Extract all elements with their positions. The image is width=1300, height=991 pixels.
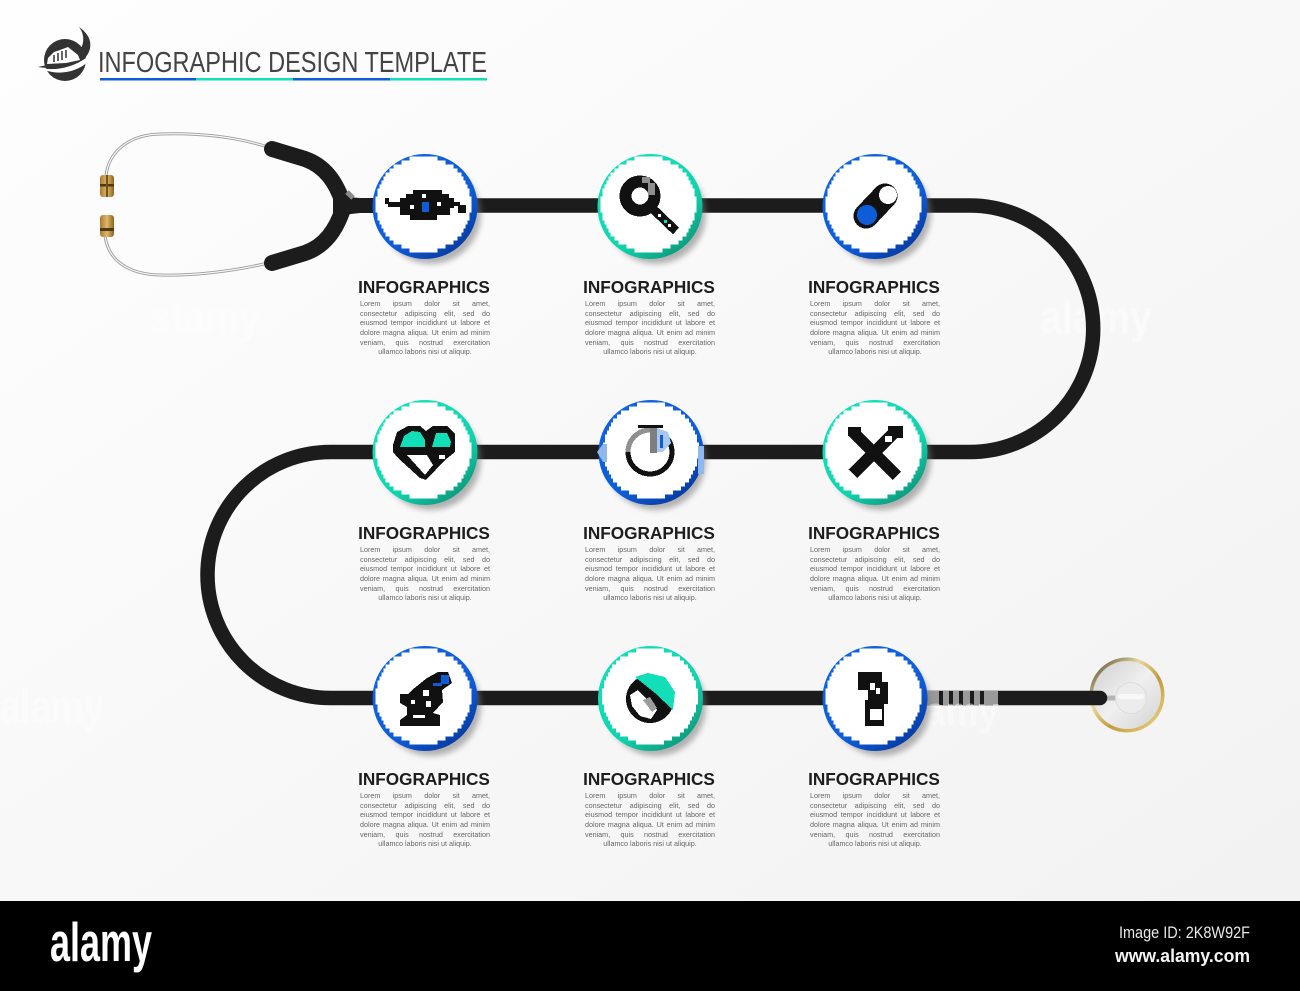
text block: step 9 bbox=[808, 769, 940, 848]
step 4 badge: heart bbox=[372, 400, 481, 510]
watermark: faint alamy marks: alamy bbox=[0, 680, 104, 732]
text block: step 4: Lorem ipsum dolor sit amet, bbox=[360, 545, 490, 554]
text block: step 2 bbox=[583, 277, 715, 356]
text block: step 1: Lorem ipsum dolor sit amet, bbox=[360, 299, 490, 308]
footer url: www.alamy.com bbox=[1114, 946, 1250, 966]
text block: step 8: Lorem ipsum dolor sit amet, bbox=[585, 791, 715, 800]
text block: step 9: consectetur adipiscing elit, sed do bbox=[810, 801, 940, 810]
text block: step 1: ullamco laboris nisi ut aliquip. bbox=[378, 347, 472, 356]
text block: step 1: consectetur adipiscing elit, sed do bbox=[360, 309, 490, 318]
text block: step 3: ullamco laboris nisi ut aliquip. bbox=[828, 347, 922, 356]
text block: step 2: eiusmod tempor incididunt ut labore et bbox=[585, 318, 715, 327]
icon: heart bbox=[393, 426, 455, 480]
text block: step 2: consectetur adipiscing elit, sed do bbox=[585, 309, 715, 318]
text block: step 7: ullamco laboris nisi ut aliquip. bbox=[378, 839, 472, 848]
watermark: faint alamy marks: alamy bbox=[1040, 291, 1152, 343]
text block: step 5 bbox=[583, 523, 715, 602]
text block: step 1: veniam, quis nostrud exercitation bbox=[360, 338, 490, 347]
text block: step 2: INFOGRAPHICS bbox=[583, 277, 715, 297]
icon: clock bbox=[628, 425, 672, 474]
tube watermark: amy bbox=[925, 690, 1000, 734]
text block: step 1 bbox=[358, 277, 490, 356]
text block: step 8: eiusmod tempor incididunt ut labore et bbox=[585, 810, 715, 819]
text block: step 2: veniam, quis nostrud exercitation bbox=[585, 338, 715, 347]
text block: step 8: veniam, quis nostrud exercitation bbox=[585, 830, 715, 839]
text block: step 7: Lorem ipsum dolor sit amet, bbox=[360, 791, 490, 800]
logo icon bbox=[38, 27, 90, 81]
step 9 badge: bottle bbox=[822, 646, 931, 756]
text block: step 7: dolore magna aliqua. Ut enim ad minim bbox=[360, 820, 490, 829]
serpentine tube path bbox=[207, 206, 1100, 698]
text block: step 5: veniam, quis nostrud exercitation bbox=[585, 584, 715, 593]
footer logo: alamy bbox=[50, 911, 152, 973]
step 3 badge: capsule bbox=[822, 154, 931, 264]
text block: step 3 bbox=[808, 277, 940, 356]
watermark: faint alamy marks: stamy bbox=[150, 291, 260, 343]
text block: step 3: Lorem ipsum dolor sit amet, bbox=[810, 299, 940, 308]
icon: crossed tools bbox=[848, 426, 903, 476]
icon: bottle bbox=[858, 672, 888, 726]
text block: step 7: consectetur adipiscing elit, sed do bbox=[360, 801, 490, 810]
text block: step 5: Lorem ipsum dolor sit amet, bbox=[585, 545, 715, 554]
step 8 badge: gauge bbox=[598, 646, 706, 756]
text block: step 8: consectetur adipiscing elit, sed do bbox=[585, 801, 715, 810]
watermark: faint alamy marks bbox=[0, 291, 1152, 732]
text block: step 8: dolore magna aliqua. Ut enim ad minim bbox=[585, 820, 715, 829]
text block: step 6: ullamco laboris nisi ut aliquip. bbox=[828, 593, 922, 602]
text block: step 4 bbox=[358, 523, 490, 602]
text block: step 6: Lorem ipsum dolor sit amet, bbox=[810, 545, 940, 554]
text block: step 9: dolore magna aliqua. Ut enim ad minim bbox=[810, 820, 940, 829]
text block: step 2: dolore magna aliqua. Ut enim ad minim bbox=[585, 328, 715, 337]
icon: magnifier bbox=[626, 177, 676, 231]
icon: capsule bbox=[857, 186, 897, 225]
text block: step 9: veniam, quis nostrud exercitation bbox=[810, 830, 940, 839]
text block: step 5: consectetur adipiscing elit, sed do bbox=[585, 555, 715, 564]
text block: step 6: eiusmod tempor incididunt ut labore et bbox=[810, 564, 940, 573]
step 6 badge: crossed tools bbox=[822, 400, 931, 510]
text block: step 2: Lorem ipsum dolor sit amet, bbox=[585, 299, 715, 308]
text block: step 8: ullamco laboris nisi ut aliquip. bbox=[603, 839, 697, 848]
text block: step 1: eiusmod tempor incididunt ut labore et bbox=[360, 318, 490, 327]
text block: step 5: dolore magna aliqua. Ut enim ad minim bbox=[585, 574, 715, 583]
text block: step 9: ullamco laboris nisi ut aliquip. bbox=[828, 839, 922, 848]
text block: step 4: INFOGRAPHICS bbox=[358, 523, 490, 543]
text block: step 3: consectetur adipiscing elit, sed do bbox=[810, 309, 940, 318]
text block: step 3: veniam, quis nostrud exercitation bbox=[810, 338, 940, 347]
text block: step 4: ullamco laboris nisi ut aliquip. bbox=[378, 593, 472, 602]
text block: step 4: eiusmod tempor incididunt ut labore et bbox=[360, 564, 490, 573]
text block: step 5: INFOGRAPHICS bbox=[583, 523, 715, 543]
icon: gauge bbox=[626, 673, 675, 723]
text block: step 3: eiusmod tempor incididunt ut labore et bbox=[810, 318, 940, 327]
text block: step 7: INFOGRAPHICS bbox=[358, 769, 490, 789]
text block: step 6: INFOGRAPHICS bbox=[808, 523, 940, 543]
text block: step 7 bbox=[358, 769, 490, 848]
text block: step 7: eiusmod tempor incididunt ut labore et bbox=[360, 810, 490, 819]
text block: step 5: eiusmod tempor incididunt ut labore et bbox=[585, 564, 715, 573]
title underline bbox=[100, 78, 487, 80]
stethoscope Y-shaped binaural tube bbox=[272, 149, 380, 263]
text block: step 7: veniam, quis nostrud exercitation bbox=[360, 830, 490, 839]
text block: step 1: INFOGRAPHICS bbox=[358, 277, 490, 297]
text block: step 3: INFOGRAPHICS bbox=[808, 277, 940, 297]
step 1 badge: eye bbox=[372, 154, 481, 264]
text block: step 6: dolore magna aliqua. Ut enim ad minim bbox=[810, 574, 940, 583]
text block: step 6: veniam, quis nostrud exercitation bbox=[810, 584, 940, 593]
text block: step 4: consectetur adipiscing elit, sed do bbox=[360, 555, 490, 564]
text block: step 9: eiusmod tempor incididunt ut labore et bbox=[810, 810, 940, 819]
step 2 badge: magnifier bbox=[598, 154, 706, 264]
text block: step 8: INFOGRAPHICS bbox=[583, 769, 715, 789]
step 7 badge: microscope bbox=[372, 646, 481, 756]
title: INFOGRAPHIC DESIGN TEMPLATE bbox=[98, 47, 487, 79]
footer image id: Image ID: 2K8W92F bbox=[1119, 923, 1250, 942]
text block: step 6 bbox=[808, 523, 940, 602]
icon: eye bbox=[385, 190, 466, 220]
text block: step 4: veniam, quis nostrud exercitation bbox=[360, 584, 490, 593]
footer bar bbox=[0, 901, 1300, 991]
text block: step 4: dolore magna aliqua. Ut enim ad minim bbox=[360, 574, 490, 583]
chest piece bbox=[1090, 658, 1164, 732]
icon: microscope bbox=[400, 672, 452, 726]
text block: step 2: ullamco laboris nisi ut aliquip. bbox=[603, 347, 697, 356]
text block: step 8 bbox=[583, 769, 715, 848]
text block: step 9: Lorem ipsum dolor sit amet, bbox=[810, 791, 940, 800]
text block: step 1: dolore magna aliqua. Ut enim ad minim bbox=[360, 328, 490, 337]
text block: step 9: INFOGRAPHICS bbox=[808, 769, 940, 789]
stethoscope headset: ear tubes and tips bbox=[100, 134, 268, 275]
text block: step 3: dolore magna aliqua. Ut enim ad minim bbox=[810, 328, 940, 337]
text block: step 6: consectetur adipiscing elit, sed do bbox=[810, 555, 940, 564]
step 5 badge: clock bbox=[597, 400, 706, 510]
text block: step 5: ullamco laboris nisi ut aliquip. bbox=[603, 593, 697, 602]
